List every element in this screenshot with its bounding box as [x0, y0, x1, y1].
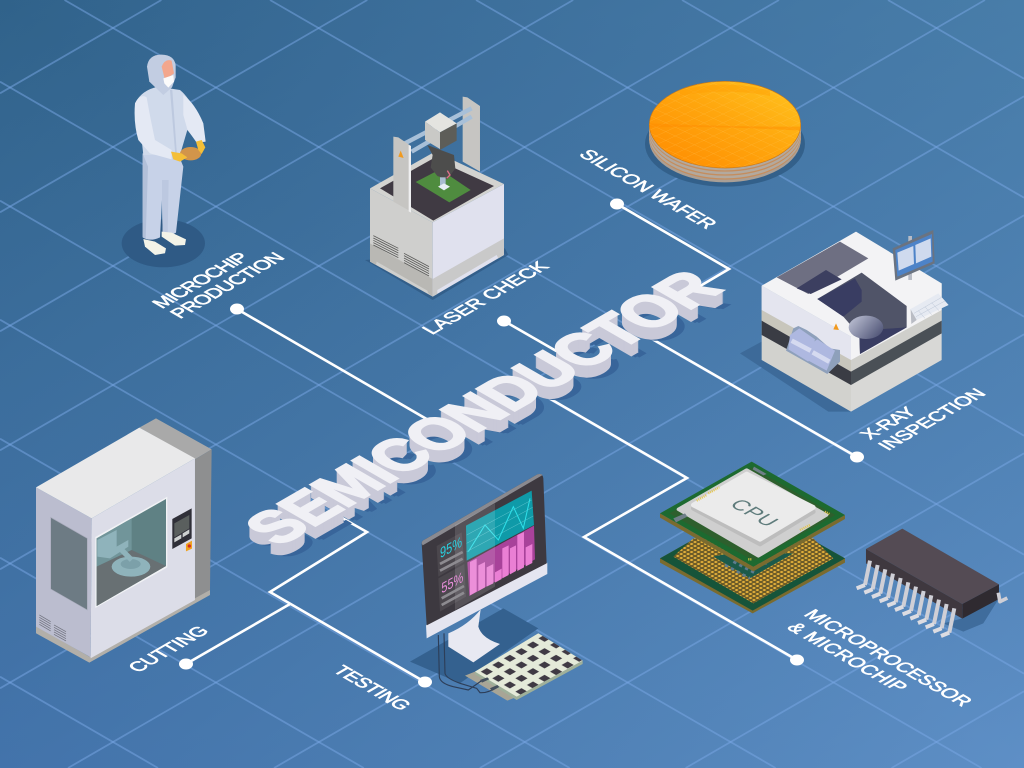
connector dots [179, 198, 864, 688]
illustration: technician in cleanroom suit [122, 55, 206, 267]
connector: x-ray inspection [640, 332, 857, 457]
illustration: cutting machine [36, 418, 212, 663]
label: microchip production: PRODUCTION [166, 250, 290, 322]
connector: testing [270, 514, 425, 682]
label: laser check: LASER CHECK [418, 259, 554, 338]
title: semiconductor 3D text: SEMICONDUCTOR [229, 261, 736, 554]
label: testing: TESTING [328, 663, 415, 714]
label: microprocessor and microchip: & MICROCHIP [782, 620, 912, 695]
illustration: computer monitor with test results [410, 474, 583, 701]
connector: silicon wafer [617, 204, 729, 292]
connector: laser check [504, 321, 565, 356]
label: microprocessor and microchip: MICROPROCESSOR [799, 607, 976, 710]
illustration: x-ray inspection machine [740, 230, 949, 412]
connector lines [186, 204, 857, 682]
illustration: stacked silicon wafers [645, 81, 805, 187]
label: microchip production: MICROCHIP [148, 250, 255, 312]
connector: cutting [186, 604, 290, 664]
connector: microchip production [237, 309, 430, 421]
illustration: computer monitor with test results: 55% [441, 569, 463, 597]
label: silicon wafer: SILICON WAFER [574, 147, 721, 232]
label: x-ray inspection: INSPECTION [874, 386, 991, 454]
illustration: CPU processor: CPU [724, 496, 783, 530]
connector: microprocessor and microchip [535, 390, 797, 660]
label: cutting: CUTTING [124, 623, 214, 676]
illustration: computer monitor with test results: 95% [440, 534, 462, 562]
illustration: laser check machine [365, 97, 508, 300]
label: x-ray inspection: X-RAY [856, 404, 922, 443]
illustration: CPU processor [660, 462, 845, 613]
illustration: microchip with pins [857, 529, 1007, 636]
